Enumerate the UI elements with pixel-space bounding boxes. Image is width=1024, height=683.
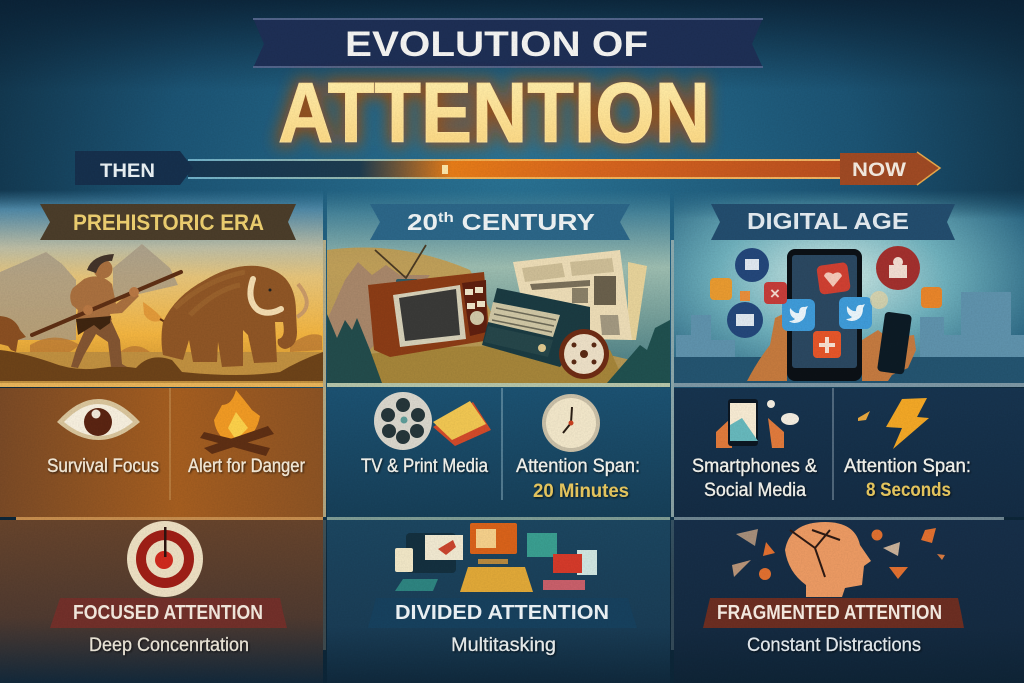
text: 20th century: th [438, 209, 454, 225]
icon: small phone [877, 311, 912, 375]
text: 20 minutes: 20 Minutes [533, 481, 629, 502]
icon: warm haze left [327, 248, 640, 383]
banner: digital age [711, 204, 955, 240]
icon: mammoth [162, 266, 307, 367]
panel: focused attention [0, 520, 323, 683]
ribbon: focused attention [50, 598, 287, 628]
icon: newspaper [513, 250, 647, 340]
icon: red circle app [876, 246, 920, 290]
text: alert for danger: Alert for Danger [188, 456, 306, 477]
banner: 20th century [370, 204, 630, 240]
icon: ground 20th [360, 346, 625, 383]
panel: 20th century scene [327, 190, 670, 383]
horizontal and vertical panel rules [0, 240, 1024, 650]
icon: red heart app [816, 262, 851, 295]
icon: orange apps [710, 278, 942, 309]
panel: divided attention [327, 520, 670, 683]
heading: attention: ATTENTION [278, 66, 710, 161]
ribbon: fragmented attention [703, 598, 964, 628]
icon: blue circle app top [735, 248, 769, 282]
icon: plus app [813, 331, 841, 358]
icon: red x app [764, 282, 787, 304]
text: constant distractions: Constant Distractions [747, 635, 921, 656]
icon: twitter app right [839, 297, 872, 329]
icon: trees right [607, 320, 670, 383]
panel: fragmented attention [674, 520, 1024, 683]
text: 8 seconds: 8 Seconds [866, 480, 951, 501]
icon: small animal [0, 316, 26, 352]
icon: lightning bolt [858, 398, 929, 449]
icon: red x app: × [770, 284, 780, 303]
text: multitasking: Multitasking [451, 635, 556, 656]
text: smartphones: Smartphones & [692, 456, 817, 477]
icon: hunter [32, 254, 181, 368]
heading: evolution of: EVOLUTION OF [345, 25, 648, 64]
icon: target [127, 521, 203, 597]
icon: lower skyline shadow [674, 357, 1024, 383]
text: focused attention: FOCUSED ATTENTION [73, 602, 263, 624]
text: prehistoric era: PREHISTORIC ERA [73, 210, 264, 235]
title banner [253, 18, 763, 68]
icon: blue circle app bottom [727, 302, 763, 338]
panel: 20th century details [327, 388, 670, 517]
icon: cracked head [785, 522, 871, 597]
icon: film reel [374, 392, 432, 450]
label: now: NOW [852, 160, 906, 181]
icon: city skyline [676, 292, 1024, 365]
text: divided attention: DIVIDED ATTENTION [395, 602, 609, 624]
icon: multitasking devices [395, 523, 597, 592]
icon: shards [732, 528, 945, 580]
panel: prehistoric details [0, 388, 323, 517]
text: social media: Social Media [704, 480, 806, 501]
icon: mountains 20th century [327, 262, 430, 383]
icon: clock [542, 394, 600, 452]
text: attention span digital: Attention Span: [844, 456, 971, 477]
icon: hand right [862, 330, 916, 381]
divider [501, 388, 503, 500]
text: 20th century: 20 [407, 209, 433, 235]
timeline arrow [75, 151, 940, 185]
icon: hand left [747, 314, 787, 381]
text: attention span 20th: Attention Span: [516, 456, 640, 477]
label: then [75, 151, 193, 185]
icon: twitter app left [782, 299, 815, 331]
icon: eye [57, 399, 140, 440]
icon: television [368, 245, 490, 357]
icon: smartphone hands [716, 399, 799, 448]
heading: attention: ATTENTION [278, 66, 710, 161]
icon: mountains prehistoric [0, 244, 178, 340]
icon: ground prehistoric [0, 334, 323, 383]
text: deep concentration: Deep Concenrtation [89, 635, 249, 656]
icon: trees left [327, 314, 382, 383]
divider [169, 388, 171, 500]
text: 20th century: CENTURY [454, 209, 595, 235]
icon: books [433, 401, 491, 446]
panel: digital age scene [674, 190, 1024, 383]
label: then: THEN [100, 161, 155, 182]
banner: prehistoric era [40, 204, 296, 240]
icon: film reel small [559, 329, 609, 379]
text: tv and print media: TV & Print Media [361, 456, 488, 477]
divider [832, 388, 834, 500]
label: now [840, 152, 940, 185]
text: digital age: DIGITAL AGE [747, 208, 909, 234]
icon: radio [482, 288, 590, 367]
ribbon: divided attention [368, 598, 637, 628]
panel: digital age details [674, 388, 1024, 517]
panel: prehistoric scene [0, 190, 323, 383]
icon: campfire [200, 390, 274, 456]
icon: large phone [787, 249, 862, 381]
text: fragmented attention: FRAGMENTED ATTENTION [717, 602, 942, 624]
text: survival focus: Survival Focus [47, 456, 159, 477]
